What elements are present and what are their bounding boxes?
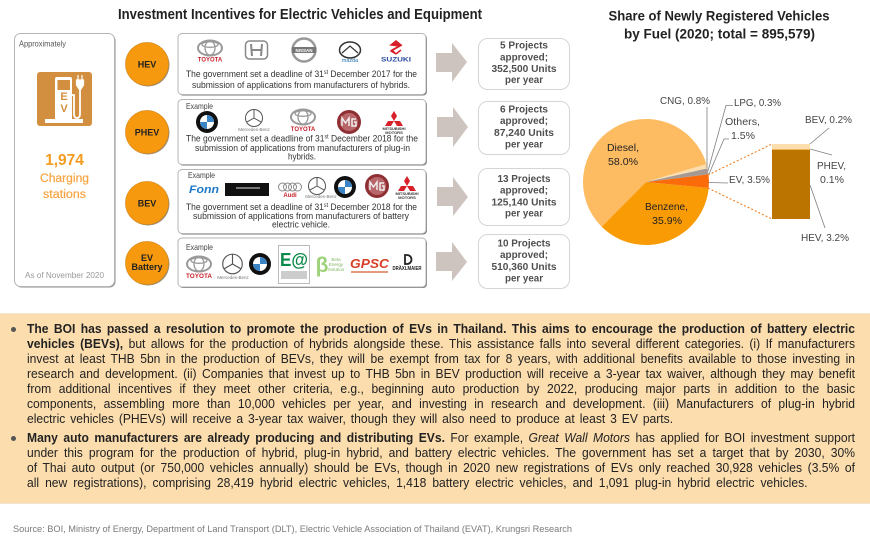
text: PHEV deadline: December 2018 for the <box>329 134 418 144</box>
text block: auto manufacturers <box>27 430 855 490</box>
circle: HEV: HEV <box>138 60 156 70</box>
logos: HEV makers <box>198 38 411 64</box>
result: EV Battery: 510,360 Units <box>492 262 557 273</box>
text: HEV deadline: st <box>324 70 328 76</box>
logos: HEV makers: TOYOTA <box>198 58 223 64</box>
logos: battery makers: Mercedes-Benz <box>217 275 250 280</box>
result: PHEV: per year <box>505 140 543 150</box>
logos: BEV makers: MITSUBISHI <box>395 191 419 196</box>
logos: PHEV makers: Mercedes-Benz <box>238 127 271 132</box>
panel: charging stations: stations <box>43 189 86 201</box>
text: PHEV deadline: st <box>324 134 329 140</box>
logos: battery makers: β <box>316 254 329 277</box>
text: HEV deadline <box>186 69 417 91</box>
result: PHEV: approved; <box>500 116 548 127</box>
text: BEV deadline: electric vehicle. <box>272 220 330 230</box>
circle: BEV <box>126 182 170 226</box>
pie labels <box>607 95 852 244</box>
title: share of newly registered vehicles <box>608 8 830 42</box>
circle: PHEV <box>126 110 170 154</box>
circle: BEV: BEV <box>138 198 156 208</box>
panel: charging stations: Charging <box>40 173 89 185</box>
icon: EV charging station <box>37 72 92 126</box>
text: PHEV deadline: The government set a deadline of 31 <box>186 134 341 144</box>
panel: policy summary <box>0 313 870 504</box>
chart: EV breakdown bar <box>772 144 810 219</box>
result: EV Battery <box>478 234 570 288</box>
result: PHEV: 6 Projects <box>500 104 548 116</box>
source note: Source: BOI, Ministry of Energy, Department of Land Transport (DLT), Electric Vehicle Association of Thailand (EVAT), Krungsri Research <box>13 524 572 535</box>
result: HEV: per year <box>505 75 543 86</box>
text: HEV deadline: submission of applications from manufacturers of hybrids. <box>192 80 410 91</box>
bullet 1 <box>11 327 16 332</box>
logos: PHEV makers: MOTORS <box>385 130 403 135</box>
logos: PHEV makers: MITSUBISHI <box>382 126 406 131</box>
arrow: PHEV <box>437 107 468 147</box>
circle: EV Battery: EV <box>141 253 153 263</box>
pie labels: Others, <box>725 116 760 128</box>
panel: charging stations: Approximately <box>19 38 67 48</box>
result: EV Battery: per year <box>505 274 543 284</box>
pie labels: CNG, 0.8% <box>660 95 710 107</box>
result: BEV: approved; <box>500 186 548 196</box>
panel: PHEV <box>178 100 427 166</box>
logos: PHEV makers <box>196 110 406 135</box>
text: BEV deadline: The government set a deadline of 31 <box>186 202 341 213</box>
circle: HEV <box>126 42 170 86</box>
circle: EV Battery <box>126 242 170 286</box>
text block: BOI resolution: research and development. (ii) Companies that invest up to THB 5bn in BEV production will receive a 3-year tax waiver, although they may benefit <box>27 366 855 380</box>
text: BEV deadline: submission of applications from manufacturers of battery <box>193 211 409 222</box>
panel: charging stations: As of November 2020 <box>25 270 104 280</box>
text block: auto manufacturers: under this program for the production of hybrid, plug-in hybrid, and battery electric vehicles. The government has set a target that by 2030, 30% <box>27 446 855 460</box>
logos: battery makers: DRÄXLMAIER <box>392 265 422 272</box>
panel: BEV <box>178 170 427 234</box>
pie labels: PHEV, <box>817 160 846 172</box>
panel: EV Battery <box>178 238 427 288</box>
logos: PHEV makers: TOYOTA <box>291 127 316 133</box>
icon: EV charging station: V <box>60 103 68 115</box>
pie labels: LPG, 0.3% <box>734 97 781 109</box>
pie labels: Diesel, <box>607 142 639 154</box>
result: PHEV: 87,240 Units <box>494 128 554 139</box>
logos: BEV makers: MOTORS <box>398 195 416 200</box>
title: investment incentives: Investment Incentives for Electric Vehicles and Equipment <box>118 7 482 23</box>
logos: BEV makers: Audi <box>283 193 297 199</box>
pie labels: 58.0% <box>608 156 638 168</box>
logos: HEV makers: SUZUKI <box>381 58 411 64</box>
panel: EV Battery: Example <box>186 242 213 252</box>
text: BEV deadline <box>186 202 417 230</box>
pie labels: 0.1% <box>820 174 844 186</box>
leader lines <box>707 106 832 228</box>
result: EV Battery: approved; <box>500 250 548 261</box>
text block: BOI resolution: vehicles (BEVs), but allows for the production of hybrids alongside these. This assistance falls into several different categories. (i) If manufacturers <box>27 336 855 350</box>
result: BEV: per year <box>505 208 543 220</box>
text: BEV deadline: st <box>324 203 328 209</box>
logos: BEV makers: Mercedes-Benz <box>305 194 338 199</box>
text block: auto manufacturers: all new registrations), comprising 28,419 hybrid electric vehicles, 1,418 battery electric vehicles, and 1,091 plug-in hybrid electric vehicles. <box>27 476 807 490</box>
text block: BOI resolution: The BOI has passed a resolution to promote the production of EVs in Thailand. This aims to encourage the production of battery electric <box>27 322 855 336</box>
panel: HEV <box>178 34 427 96</box>
circle: PHEV: PHEV <box>135 128 159 138</box>
text block: auto manufacturers: of Thai auto output (or 750,000 vehicles annually) should be EVs, though in 2020 new registrations of EVs only reached 30,928 vehicles (3.5% of <box>27 460 855 474</box>
pie labels: 35.9% <box>652 215 682 227</box>
logos: battery makers <box>186 246 422 284</box>
panel: PHEV: Example <box>186 101 213 111</box>
icon: EV charging station: E <box>60 91 68 103</box>
text block: BOI resolution: electric vehicles (PHEVs) will receive a 3-year tax waiver, though they will also need to produce at least 3 EV parts. <box>27 412 673 426</box>
result: BEV <box>478 168 570 226</box>
pie labels: Benzene, <box>645 201 688 213</box>
circle: EV Battery: Battery <box>131 262 163 272</box>
pie labels: 1.5% <box>731 130 755 142</box>
arrow: EV Battery <box>436 242 467 281</box>
text block: BOI resolution <box>27 322 855 426</box>
pie labels: EV, 3.5% <box>729 174 770 186</box>
result: BEV: 125,140 Units <box>492 198 557 208</box>
result: EV Battery: 10 Projects <box>498 238 551 250</box>
text block: BOI resolution: invest at least THB 5bn in the production of BEVs, they will be exempt from tax for 8 years, with additional benefits available to those investing in <box>27 352 855 366</box>
result: BEV: 13 Projects <box>498 174 551 185</box>
pie labels: HEV, 3.2% <box>801 232 849 244</box>
text block: auto manufacturers: Many auto manufacturers are already producing and distributing EVs. For example, Great Wall Motors has applied for BOI investment support <box>27 430 855 444</box>
text: PHEV deadline: hybrids. <box>288 152 316 162</box>
logos: BEV makers: Fonn <box>189 184 219 196</box>
text block: BOI resolution: components, assembling more than 10,000 vehicles per year, and investing in research and development. (iii) Manufacturers of plug-in hybrid <box>27 396 855 410</box>
pie chart: fuel share <box>583 119 709 245</box>
text block: BOI resolution: from additional incentives if they meet other criteria, e.g., beginning auto production by 2022, producing major parts in addition to the basic <box>27 382 855 396</box>
result: HEV: 5 Projects <box>500 40 548 52</box>
title: share of newly registered vehicles: by Fuel (2020; total = 895,579) <box>624 26 815 42</box>
result: PHEV <box>478 102 570 154</box>
arrow: BEV <box>437 177 468 216</box>
text: PHEV deadline: submission of applications from manufacturers of plug-in <box>195 143 410 154</box>
logos: battery makers: Solution <box>328 267 345 272</box>
bullet 2 <box>11 436 16 441</box>
logos: BEV makers <box>189 174 419 200</box>
logos: battery makers: Energy <box>329 262 344 267</box>
panel: charging stations: 1,974 <box>45 152 84 169</box>
logos: HEV makers: NISSAN <box>295 48 313 53</box>
result: HEV <box>478 38 570 90</box>
logos: battery makers: Beta <box>331 257 341 262</box>
arrow: HEV <box>436 43 467 82</box>
text: PHEV deadline <box>186 134 418 162</box>
panel: charging stations <box>14 34 116 288</box>
text: HEV deadline: December 2017 for the <box>328 69 417 80</box>
text: HEV deadline: The government set a deadline of 31 <box>186 69 341 80</box>
connector lines: pie to bar <box>708 144 772 219</box>
title: share of newly registered vehicles: Share of Newly Registered Vehicles <box>608 8 830 24</box>
logos: HEV makers: mazda <box>342 58 359 64</box>
result: HEV: approved; <box>500 52 548 64</box>
pie labels: BEV, 0.2% <box>805 114 852 126</box>
result: HEV: 352,500 Units <box>492 64 557 75</box>
logos: battery makers: GPSC <box>350 256 390 271</box>
logos: battery makers: TOYOTA <box>186 274 213 280</box>
text: BEV deadline: December 2018 for the <box>328 202 417 213</box>
logos: battery makers: E@ <box>280 250 308 270</box>
panel: BEV: Example <box>188 170 215 180</box>
